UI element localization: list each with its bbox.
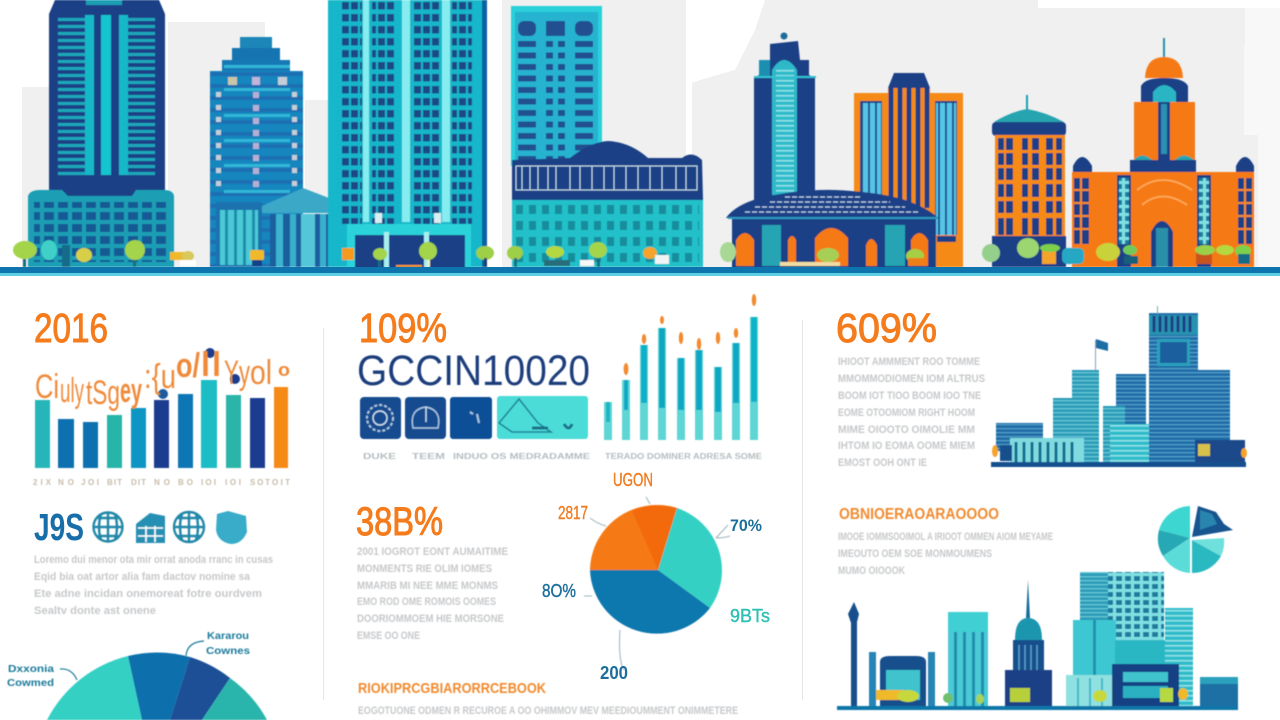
- body text: Loremo dui menor ota mir orrat anoda rranc in cusas: [34, 554, 273, 566]
- stat heading: 609%: 609%: [836, 305, 937, 351]
- tile: triangle map: [497, 396, 588, 439]
- chart annotations: o/: [176, 347, 200, 385]
- landmark: office block: [948, 612, 988, 706]
- tile captions: DUKE: [363, 452, 397, 461]
- stat heading: 109%: 109%: [359, 305, 447, 351]
- navy subheading: GCCIN10020: [357, 347, 590, 395]
- panel: right column: [836, 305, 1247, 710]
- body text: EMO ROD OME ROMOIS OOMES: [357, 596, 496, 608]
- chart annotations: o: [278, 360, 290, 380]
- body text: MMOMMODIOMEN IOM ALTRUS: [838, 373, 985, 385]
- tile: clock: [405, 397, 446, 439]
- chart axis labels: OIT: [272, 478, 290, 487]
- chart axis labels: DIT: [131, 478, 146, 487]
- icon: globe outline: [174, 512, 204, 542]
- chart axis labels: IOI: [225, 478, 241, 487]
- pie chart: cropped: [47, 653, 267, 720]
- tile: marker: [450, 397, 492, 439]
- label: 80%: 8O%: [542, 581, 576, 601]
- chart annotations: Ci: [35, 368, 59, 406]
- body text: IMEOUTO OEM SOE MONMOUMENS: [838, 548, 992, 560]
- building: navy spire tower: [754, 32, 816, 210]
- panel dividers: [323, 320, 803, 700]
- stat heading: 2016: 2016: [34, 305, 108, 351]
- body text: Ete adne incidan onemoreat fotre ourdvem: [34, 588, 262, 600]
- panel: centre column: [356, 294, 770, 717]
- body text: [838, 531, 1053, 577]
- chart axis labels: 2IX: [33, 478, 52, 487]
- tile captions: INDUO OS MEDRADAMME: [453, 452, 591, 461]
- body text: BOOM IOT TIOO BOOM IOO TNE: [838, 390, 981, 402]
- stat heading: 38B%: 38B%: [356, 500, 443, 544]
- pie label: upper right: [186, 631, 250, 657]
- panel: left column: [7, 305, 290, 720]
- chart axis labels: SOT: [250, 478, 270, 487]
- icon: map blob: [216, 511, 247, 544]
- street vehicles and trees: [876, 688, 1188, 704]
- landmark: pillar: [848, 602, 859, 706]
- pie chart: small with exploded slice: [1158, 506, 1233, 573]
- landmark: domed tower: [1005, 580, 1052, 706]
- pie chart: main: [590, 505, 722, 634]
- chart axis labels: IOI: [201, 478, 216, 487]
- building: domed hall: [726, 190, 938, 268]
- icon row: [94, 511, 247, 544]
- chart annotations: ey: [120, 372, 142, 410]
- body text: DOORIOMMOEM HIE MORSONE: [357, 613, 504, 625]
- chart axis labels: NO: [154, 478, 170, 487]
- body text: [357, 546, 508, 642]
- body text: [34, 554, 273, 617]
- city illustration: lower: [837, 572, 1238, 710]
- chart annotations: Yy: [224, 354, 250, 392]
- icon tiles: [360, 396, 588, 439]
- ground line: [0, 267, 1280, 276]
- label: 2817: 2817: [558, 503, 588, 523]
- building: navy tower: [28, 0, 174, 267]
- subheading: RIOKIPRCGBIARORRCEBOOK: [358, 680, 546, 697]
- landmark: small pavilion: [1200, 677, 1238, 706]
- building: columned library: [512, 141, 703, 267]
- tile captions: TEEM: [412, 452, 445, 461]
- chart axis labels: BO: [178, 478, 193, 487]
- chart axis labels: NO: [58, 478, 74, 487]
- body text: Eqid bia oat artor alia fam dactov nomine sa: [34, 571, 251, 583]
- label: 200: 200: [600, 663, 628, 683]
- body text: MONMENTS RIE OLIM IOMES: [357, 563, 492, 575]
- icon: city block: [136, 513, 165, 543]
- landmark: station: [869, 652, 935, 706]
- tile: gear: [360, 397, 401, 439]
- subheading: OBNIOERAOARAOOOO: [839, 506, 999, 523]
- body text: EOME OTOOMIOM RIGHT HOOM: [838, 407, 975, 419]
- chart annotations: ll: [200, 346, 222, 384]
- chart axis labels: JOI: [81, 478, 99, 487]
- pie label: left: [7, 664, 77, 689]
- chart annotations: tSg: [86, 374, 120, 412]
- body text: Sealtv donte ast onene: [34, 605, 156, 617]
- chart axis labels: BIT: [107, 478, 122, 487]
- stat heading: 3DS: J9S: [34, 507, 84, 549]
- building: tall teal tower: [328, 0, 487, 268]
- body text: EOGOTUONE ODMEN R RECUROE A OO OHIMMOV MEV MEEDIOUMMENT ONIMMETERE: [358, 705, 738, 717]
- city illustration: upper: [991, 306, 1247, 467]
- body text: MIME OIOOTO OIMOLIE MM: [838, 424, 975, 436]
- street trees and people: [13, 238, 1251, 267]
- body text: IMOOE IOMMSOOIMOL A IRIOOT OMMEN AIOM MEYAME: [838, 531, 1053, 543]
- landmark: tower cluster: [1066, 572, 1193, 706]
- chart annotations: :{u: [144, 358, 176, 396]
- chart axis labels: [33, 478, 290, 487]
- building: cyan office block: [511, 6, 602, 166]
- body text: 2001 IOGROT EONT AUMAITIME: [357, 546, 508, 558]
- body text: EMOST OOH ONT IE: [838, 457, 927, 469]
- label: 9BTs: 9BTs: [730, 606, 770, 626]
- pie label: upper right: Cownes: [206, 646, 250, 657]
- mini bar chart: [604, 294, 758, 440]
- chart annotations: [35, 346, 290, 412]
- bar chart: [35, 348, 288, 468]
- body text: IHIOOT AMMMENT ROO TOMME: [838, 356, 980, 368]
- body text: [838, 356, 985, 469]
- background: pale skyline wash: [22, 0, 1280, 267]
- pie label: upper right: Kararou: [207, 631, 249, 642]
- chart annotations: ol: [250, 354, 272, 392]
- skyline illustration: [13, 0, 1254, 268]
- chart annotations: uly: [60, 372, 84, 410]
- tile captions: TERADO DOMINER ADRESA SOME: [605, 452, 763, 461]
- body text: IHTOM IO EOMA OOME MIEM: [838, 440, 975, 452]
- icon: globe: [94, 512, 122, 542]
- pie label: left: Dxxonia: [8, 664, 55, 675]
- label: 70%: 70%: [730, 516, 762, 535]
- building: round-top orange tower: [992, 95, 1066, 267]
- building: orange domed palace: [1072, 38, 1254, 267]
- building: blue stepped tower: [210, 37, 347, 267]
- pie labels and leaders: [584, 497, 730, 670]
- body text: MMARIB MI NEE MME MONMS: [357, 580, 498, 592]
- building: orange striped tower: [854, 73, 963, 267]
- tile captions: [363, 452, 763, 461]
- pie label: left: Cowmed: [7, 678, 54, 689]
- label: UGON: UGON: [613, 470, 653, 490]
- body text: MUMO OIOOOK: [838, 565, 905, 577]
- body text: EMSE OO ONE: [357, 630, 420, 642]
